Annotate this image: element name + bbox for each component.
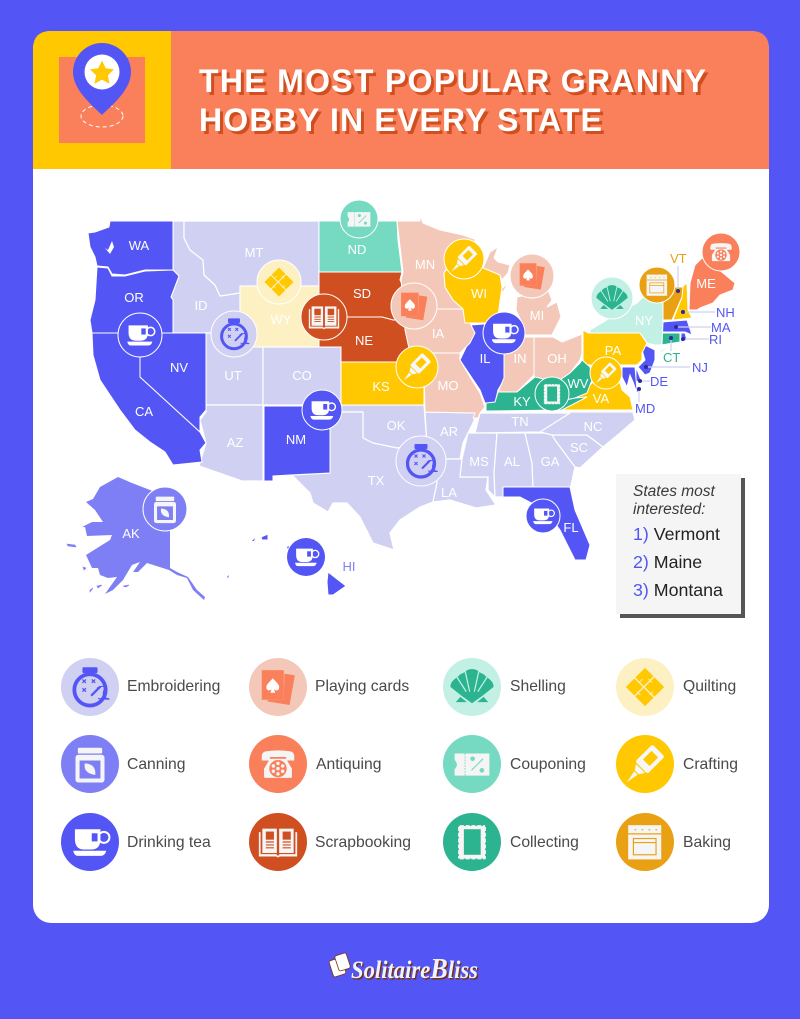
state labels: ME [696, 276, 716, 291]
state labels: KY [513, 394, 531, 409]
small-state callouts: VT [670, 251, 687, 266]
header banner [33, 31, 769, 169]
state labels: KS [372, 379, 390, 394]
map icon: couponing, ND [340, 200, 378, 238]
legend item: drinking tea: Drinking tea [127, 834, 211, 851]
state labels: NM [286, 432, 306, 447]
legend item: playing cards: Playing cards [315, 678, 409, 695]
state labels: PA [605, 343, 622, 358]
state labels: NV [170, 360, 188, 375]
legend item: crafting: Crafting [683, 756, 738, 773]
states: crafting, yellow [341, 247, 692, 410]
states: scrapbooking, rust [319, 272, 409, 362]
states: playing cards, pale coral [397, 215, 582, 418]
legend item: baking: Baking [683, 834, 731, 851]
state: antiquing, Maine [689, 258, 735, 310]
callout: states most interested: interested: [633, 501, 705, 518]
state labels: MI [530, 308, 544, 323]
small-state callouts: DE [650, 374, 668, 389]
state labels: AR [440, 424, 458, 439]
small-state callouts: NH [716, 305, 735, 320]
callout: states most interested: States most [633, 483, 716, 500]
states: couponing, teal [319, 221, 402, 272]
legend item: canning: Canning [127, 756, 185, 773]
state labels: MS [469, 454, 489, 469]
map icon: quilting, WY [257, 260, 301, 304]
legend item: baking [616, 813, 731, 871]
map icon: tea, HI [287, 538, 325, 576]
legend item: drinking tea [61, 813, 211, 871]
US map [67, 200, 740, 600]
title [199, 63, 706, 138]
state labels: LA [441, 485, 457, 500]
map icon: embroidering, TX [396, 436, 446, 486]
map icon: baking, VT [639, 267, 675, 303]
state labels: IA [432, 326, 444, 341]
state labels: TN [511, 414, 529, 429]
state: shelling, New York [590, 293, 673, 352]
map icon: cards, IA [391, 283, 437, 329]
map icon: embroidering, UT/ID [211, 311, 257, 357]
title: HOBBY IN EVERY STATE [199, 102, 602, 138]
state labels: WA [129, 238, 150, 253]
legend item: scrapbooking [249, 813, 411, 871]
small-state callouts [635, 251, 735, 416]
small-state callouts: MD [635, 401, 655, 416]
puget sound notch [105, 241, 114, 254]
legend item: antiquing [249, 735, 381, 793]
logo: Solitaire Bliss: SolitaireBliss [351, 953, 478, 985]
state labels: MN [415, 257, 435, 272]
legend [61, 658, 738, 871]
state labels: CA [135, 404, 153, 419]
state labels: SC [570, 440, 588, 455]
legend item: canning [61, 735, 185, 793]
state labels: TX [368, 473, 385, 488]
state labels: ID [194, 298, 208, 313]
small-state callouts: NJ [692, 360, 708, 375]
states: drinking tea, blue [88, 221, 692, 595]
map icon: antiquing, ME [702, 233, 740, 271]
small-state callouts: CT [663, 350, 680, 365]
legend item: embroidering: Embroidering [127, 678, 220, 695]
small-state callouts: RI [709, 332, 722, 347]
Alaska islands [67, 544, 129, 592]
state labels: WV [568, 376, 589, 391]
legend item: embroidering [61, 658, 220, 716]
map icon: tea, IL [483, 312, 525, 354]
legend item: playing cards [249, 658, 409, 716]
callout: states most interested [616, 474, 745, 618]
icon: map pin on square [59, 43, 145, 143]
state labels: OK [387, 418, 406, 433]
state labels: NC [584, 419, 602, 434]
legend item: shelling: Shelling [510, 678, 566, 695]
state labels: VA [593, 391, 610, 406]
callout: states most interested: 3) Montana [633, 580, 723, 600]
map icon: canning, AK [143, 487, 187, 531]
map icon: tea, OR/CA [118, 313, 162, 357]
state labels: IL [480, 351, 490, 366]
state labels: FL [563, 520, 579, 535]
state labels: MO [438, 378, 458, 393]
legend item: antiquing: Antiquing [316, 756, 381, 773]
legend item: collecting [443, 813, 579, 871]
legend item: crafting [616, 735, 738, 793]
legend item: shelling [443, 658, 566, 716]
states: quilting, pale yellow [240, 286, 319, 347]
map icon: cards, MI [510, 254, 554, 298]
map icon: collecting, KY/WV [535, 377, 569, 411]
callout: states most interested: 2) Maine [633, 552, 702, 572]
legend item: quilting [616, 658, 736, 716]
map icon: crafting, VA [590, 357, 622, 389]
state labels: AZ [227, 435, 243, 450]
state labels: SD [353, 286, 371, 301]
label: HI: HI [342, 559, 356, 574]
state labels: IN [514, 351, 526, 366]
state labels: OR [124, 290, 144, 305]
title: THE MOST POPULAR GRANNY [199, 63, 706, 99]
states: embroidering, lavender [171, 221, 635, 550]
state labels: WI [471, 286, 487, 301]
legend item: quilting: Quilting [683, 678, 736, 695]
map icon: crafting, WI [444, 239, 484, 279]
state labels: ND [348, 242, 366, 257]
map icon: tea, FL [526, 499, 560, 533]
header yellow panel [33, 31, 171, 169]
map icon: crafting, KS [396, 346, 438, 388]
state: baking, Vermont [663, 287, 683, 320]
state labels: MT [245, 245, 263, 260]
map icon: shelling, NY [591, 277, 633, 319]
header coral background [171, 31, 769, 169]
map icon: scrapbooking, SD/NE [301, 294, 347, 340]
small-state callouts: MA [711, 320, 731, 335]
state labels: AK [122, 526, 140, 541]
state labels [122, 238, 716, 541]
states: collecting, green [486, 333, 680, 411]
legend item: scrapbooking: Scrapbooking [315, 834, 411, 851]
state labels: NE [355, 333, 373, 348]
state labels: GA [541, 454, 560, 469]
state labels: UT [224, 368, 242, 383]
state labels: OH [547, 351, 567, 366]
state: canning, Alaska [82, 477, 205, 600]
state labels: AL [504, 454, 520, 469]
legend item: collecting: Collecting [510, 834, 579, 851]
state labels: WY [271, 312, 292, 327]
legend item: couponing: Couponing [510, 756, 586, 773]
state labels: NY [635, 313, 653, 328]
legend item: couponing [443, 735, 586, 793]
state labels: CO [292, 368, 312, 383]
callout: states most interested: 1) Vermont [633, 524, 720, 544]
map icon: tea, NM [302, 390, 342, 430]
